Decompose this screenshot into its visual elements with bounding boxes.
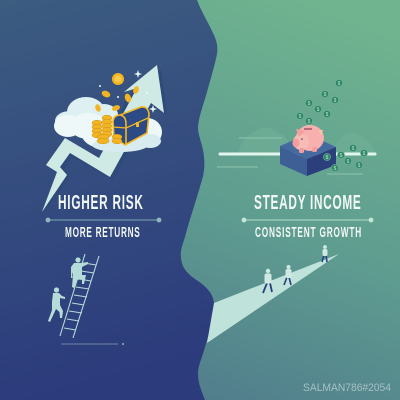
dollar coins xyxy=(296,79,368,172)
subheading: more returns: MORE RETURNS xyxy=(65,223,140,241)
heading: higher risk: HIGHER RISK xyxy=(58,192,143,214)
speed lines xyxy=(217,138,363,174)
baseline with dot xyxy=(61,343,124,345)
coin stacks xyxy=(92,115,122,144)
dollar coins: $ xyxy=(352,146,355,152)
background: blue panel xyxy=(0,0,217,400)
divider: left xyxy=(46,218,161,222)
background clouds xyxy=(238,128,291,154)
illustration: ladder xyxy=(60,254,99,338)
dollar coins: $ xyxy=(308,119,311,125)
illustration: light beam path xyxy=(207,254,339,343)
illustration: treasure on cloud xyxy=(54,70,162,152)
dollar coins: $ xyxy=(299,114,302,120)
dollar coins: $ xyxy=(340,153,343,159)
platform box xyxy=(280,134,336,176)
dollar coins: $ xyxy=(334,166,337,172)
flying coins xyxy=(94,73,140,112)
sparkles xyxy=(99,70,157,113)
illustration: savings scene xyxy=(217,79,376,176)
dollar coins: $ xyxy=(358,163,361,169)
piggy bank xyxy=(292,125,324,153)
person waiting below xyxy=(48,287,65,322)
dollar coins: $ xyxy=(347,159,350,165)
heading: steady income: STEADY INCOME xyxy=(254,192,361,214)
walking person front xyxy=(263,269,272,293)
walking person back xyxy=(322,245,328,262)
dollar coins: $ xyxy=(326,155,329,161)
watermark: SALMAN786#2054 xyxy=(303,382,391,394)
cloud xyxy=(54,97,162,152)
subheading: consistent growth: CONSISTENT GROWTH xyxy=(255,223,361,241)
dollar coins: $ xyxy=(317,107,320,113)
illustration: rising arrow xyxy=(42,65,167,213)
dollar coins: $ xyxy=(338,81,341,87)
walking person middle xyxy=(284,265,292,285)
arrow body xyxy=(42,65,164,212)
person climbing ladder xyxy=(71,257,88,288)
dollar coins: $ xyxy=(326,112,329,118)
dollar coins: $ xyxy=(334,98,337,104)
dollar coins: $ xyxy=(308,101,311,107)
dollar coins: $ xyxy=(324,92,327,98)
treasure chest xyxy=(113,107,149,145)
arrow shadow xyxy=(44,70,167,213)
divider: right xyxy=(242,218,373,222)
dollar coins: $ xyxy=(363,151,366,157)
white track xyxy=(220,152,375,156)
